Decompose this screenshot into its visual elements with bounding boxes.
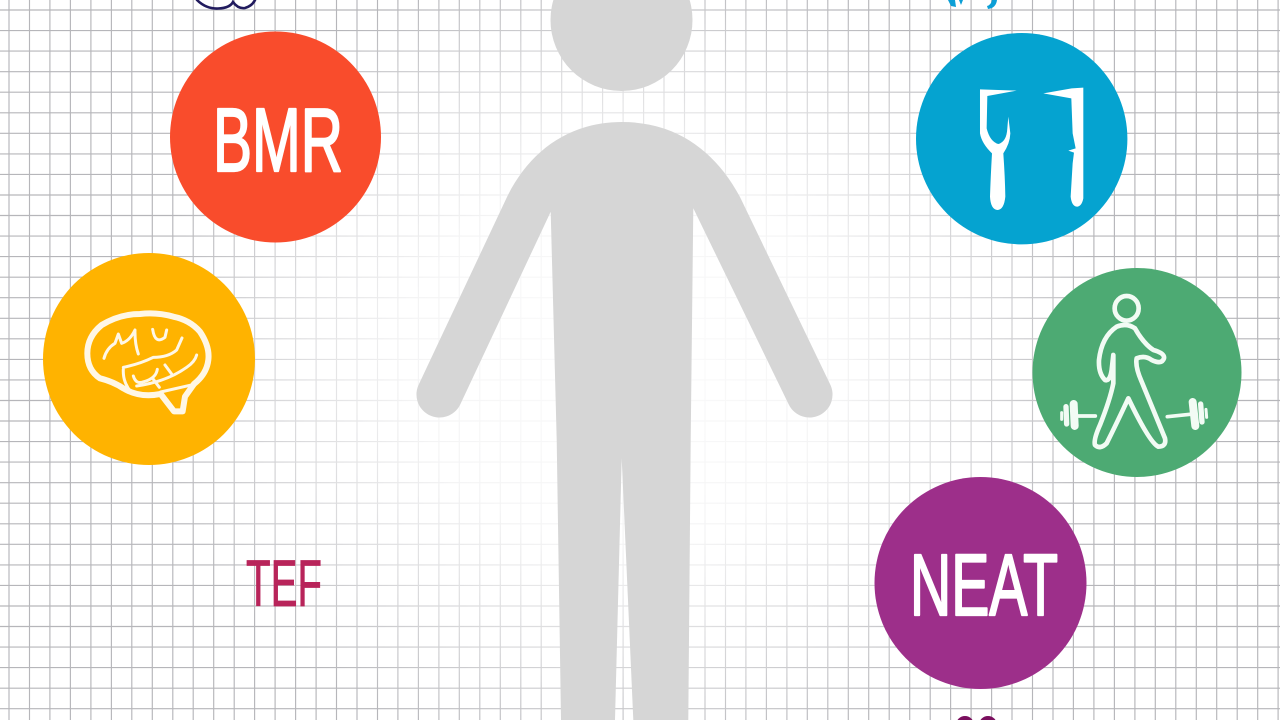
icon: brain	[87, 313, 209, 411]
cropped magenta icon fragment, bottom	[956, 716, 997, 720]
walker body	[1095, 325, 1165, 447]
cropped blue icon fragment, top	[948, 0, 997, 9]
BMR label: BMR	[213, 91, 343, 191]
yellow circle	[43, 253, 255, 465]
brain badge	[43, 253, 255, 465]
left dumbbell	[1078, 410, 1095, 421]
walking and weights badge	[1032, 268, 1242, 477]
fork and knife badge	[916, 33, 1127, 244]
walker head	[1115, 296, 1139, 321]
NEAT label: NEAT	[910, 537, 1058, 634]
TEF label: TEF	[246, 546, 322, 620]
knife	[1043, 88, 1083, 207]
icon: walking figure with dumbbells	[1062, 296, 1207, 447]
NEAT badge	[874, 477, 1086, 689]
fork	[980, 89, 1017, 210]
right dumbbell	[1167, 414, 1190, 417]
icon: fork and knife	[980, 88, 1083, 210]
BMR badge	[170, 32, 381, 242]
brain folds	[104, 330, 138, 358]
BMR circle	[170, 32, 381, 242]
NEAT circle	[874, 477, 1086, 689]
blue circle	[916, 33, 1127, 244]
green circle	[1032, 268, 1242, 477]
central human figure	[416, 0, 833, 720]
brain outline	[87, 313, 209, 411]
cropped purple icon fragment, top	[197, 0, 255, 9]
figure head	[550, 0, 692, 91]
figure body	[416, 122, 833, 720]
